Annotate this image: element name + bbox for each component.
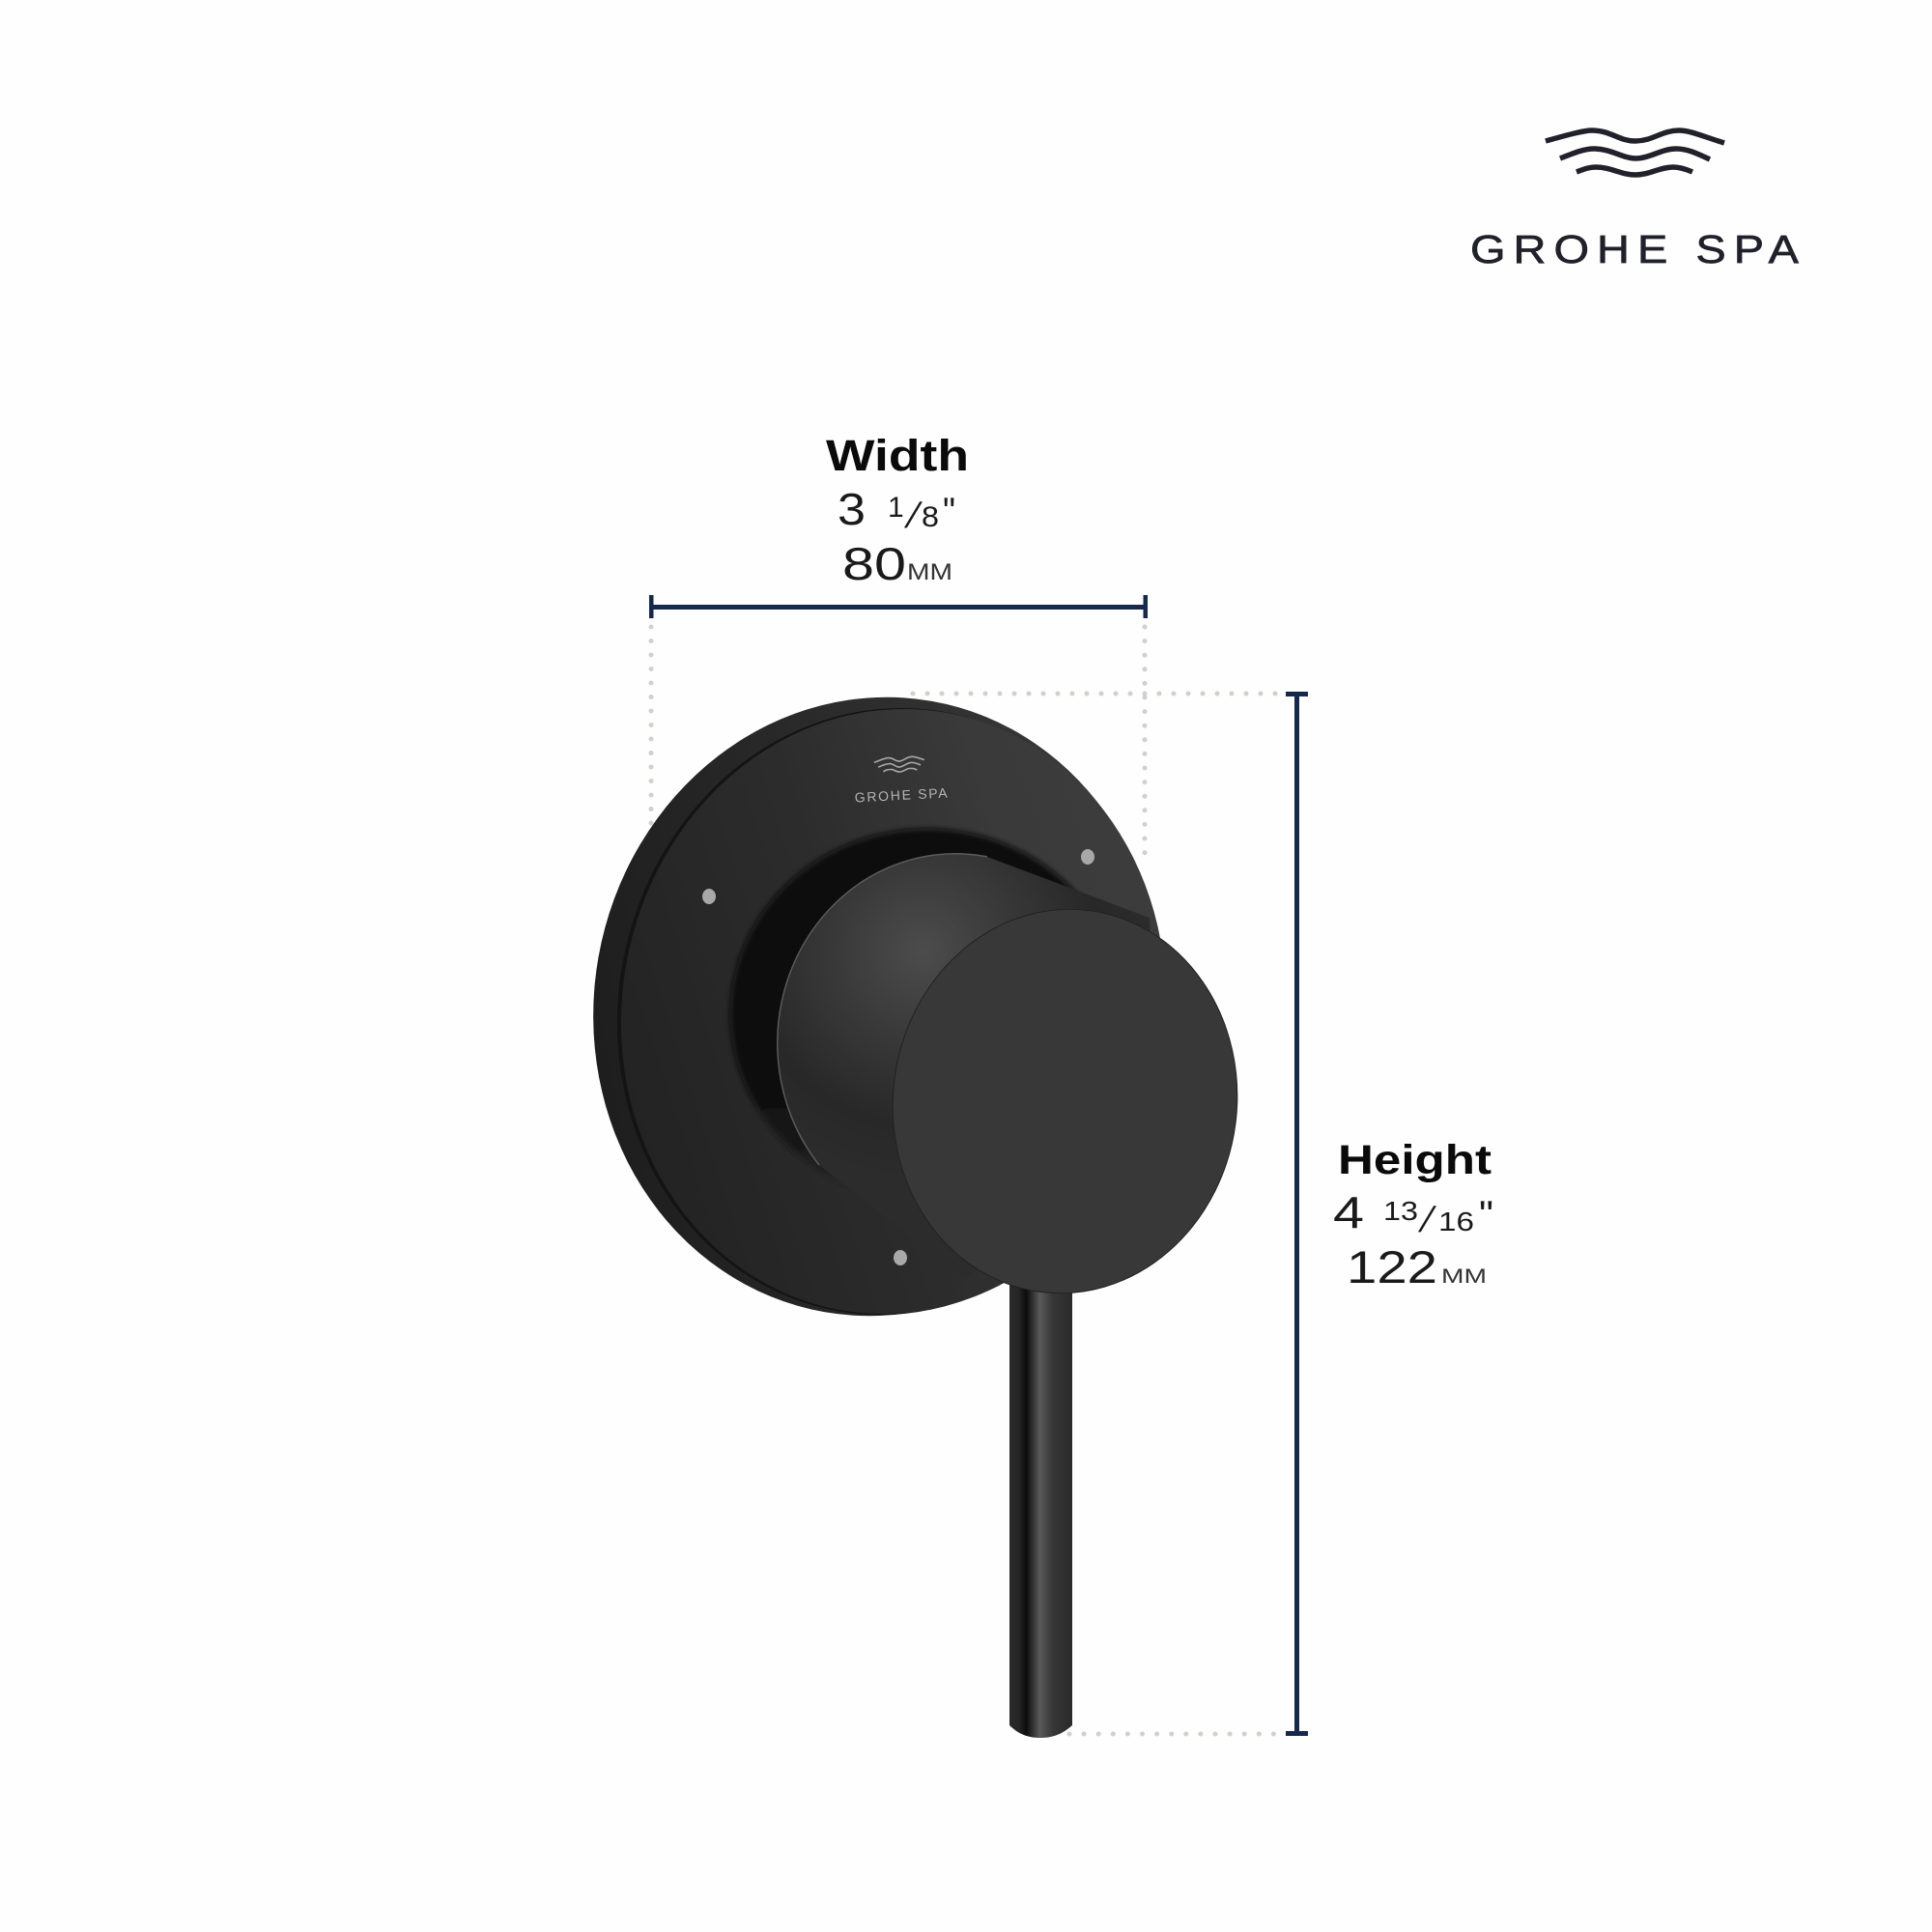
icon: engraved waves <box>874 756 924 773</box>
knob cap <box>871 890 1259 1313</box>
height millimetres: 122 <box>1347 1241 1437 1293</box>
height inches: 13 <box>1383 1196 1418 1226</box>
width millimetres: MM <box>907 559 952 585</box>
width inches: 1 <box>888 492 904 524</box>
height label <box>1333 1137 1493 1293</box>
height dimension bar <box>1286 692 1308 1736</box>
width inches: 3 <box>838 484 866 534</box>
width millimetres: 80 <box>842 538 906 589</box>
engraved wordmark: GROHE SPA <box>854 784 949 805</box>
width inches: " <box>943 491 955 533</box>
width inches: 8 <box>922 501 939 533</box>
height inches: 16 <box>1438 1207 1474 1236</box>
width label <box>826 431 969 589</box>
plate engraved logo <box>853 754 949 805</box>
cylindrical body <box>778 854 1159 1280</box>
width heading: Width <box>826 431 969 480</box>
dotted guide: left width extension <box>649 627 653 831</box>
width inches: / <box>901 497 924 536</box>
width inches <box>838 484 955 536</box>
height inches <box>1333 1187 1493 1240</box>
logo wordmark: GROHE SPA <box>1470 227 1806 271</box>
height millimetres: MM <box>1441 1265 1487 1288</box>
icon: logo waves <box>1546 130 1724 175</box>
width dimension bar <box>649 595 1148 618</box>
recessed dark shadow around cylinder <box>728 826 1078 1175</box>
dotted guide: right width extension <box>1142 627 1148 856</box>
brand logo <box>1470 130 1806 271</box>
height inches: / <box>1415 1201 1438 1240</box>
height inches: " <box>1479 1194 1493 1236</box>
width millimetres <box>842 538 952 589</box>
round back plate <box>545 652 1213 1361</box>
height heading: Height <box>1338 1137 1492 1183</box>
height millimetres <box>1347 1241 1487 1293</box>
product: shower valve trim <box>593 697 1238 1738</box>
screw dots <box>702 849 1094 1265</box>
dotted guide: bottom height extension <box>1069 1731 1277 1737</box>
dotted guide: top height extension <box>913 692 1290 696</box>
height inches: 4 <box>1333 1187 1364 1237</box>
lever handle <box>1009 1275 1072 1738</box>
infographic canvas <box>593 128 1799 1738</box>
